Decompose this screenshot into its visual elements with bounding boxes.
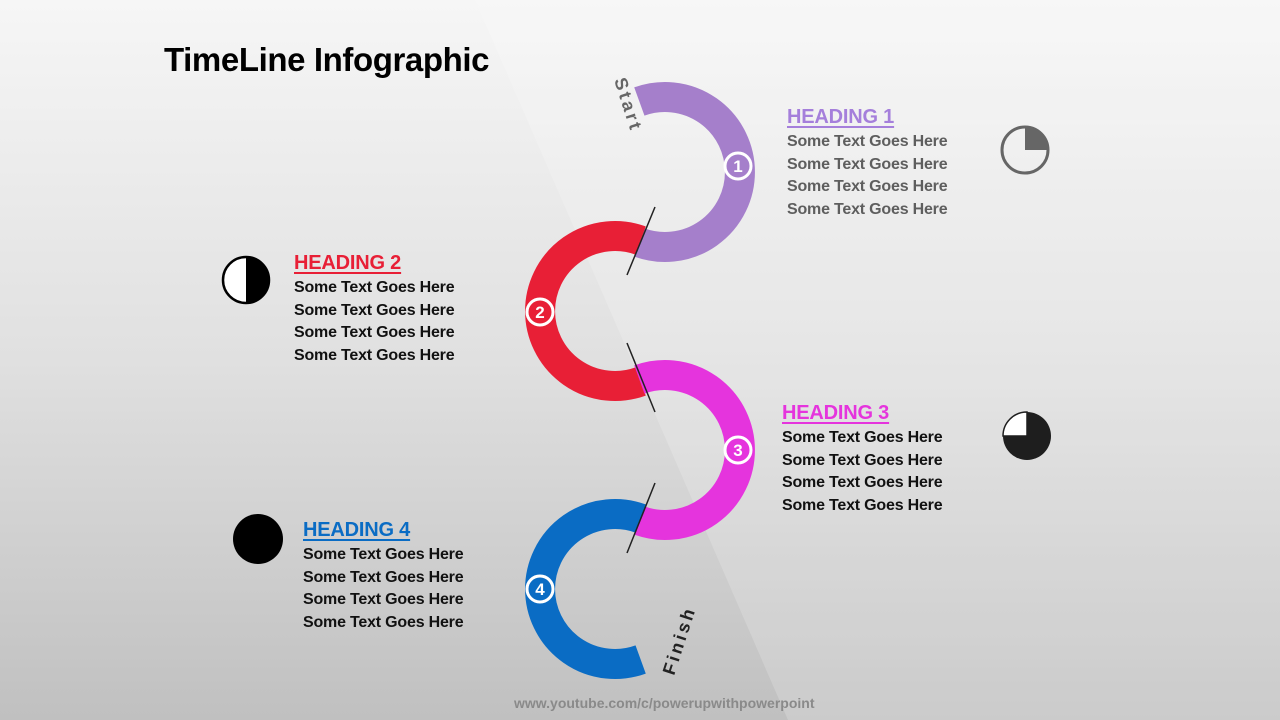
text block: heading 2 xyxy=(294,252,454,364)
text block: heading 2: Some Text Goes Here xyxy=(294,302,454,318)
text block: heading 1: Some Text Goes Here xyxy=(787,178,947,195)
text block: heading 4: Some Text Goes Here xyxy=(303,568,463,586)
text block: heading 1: Some Text Goes Here xyxy=(787,156,947,172)
marker 4 xyxy=(527,576,553,602)
text block: heading 3: Some Text Goes Here xyxy=(782,474,942,491)
ring 3 magenta xyxy=(639,375,740,525)
text block: heading 4: Some Text Goes Here xyxy=(303,546,463,563)
text block: heading 1: Some Text Goes Here xyxy=(787,200,947,218)
marker 3: 3 xyxy=(733,441,743,460)
marker 1: 1 xyxy=(733,157,743,176)
start label: Start xyxy=(610,75,647,135)
icon: full pie xyxy=(233,514,283,564)
text block: heading 3: HEADING 3 xyxy=(782,402,889,424)
text block: heading 1: HEADING 1 xyxy=(787,106,894,128)
light diagonal band xyxy=(475,0,1280,720)
timeline rings xyxy=(540,97,740,664)
icon: quarter pie xyxy=(1002,127,1048,173)
text block: heading 2: HEADING 2 xyxy=(294,252,401,274)
text block: heading 4 xyxy=(303,519,464,630)
ring 1 purple xyxy=(639,97,740,247)
text block: heading 2: Some Text Goes Here xyxy=(294,324,454,341)
icon: half pie xyxy=(223,257,269,303)
text block: heading 4: Some Text Goes Here xyxy=(303,614,463,630)
title: TimeLine Infographic xyxy=(164,41,489,78)
marker 1 xyxy=(725,153,751,179)
text block: heading 1 xyxy=(787,106,948,218)
marker 2 xyxy=(527,299,553,325)
marker 4: 4 xyxy=(535,580,545,599)
ring 2 red xyxy=(540,236,641,386)
text block: heading 2: Some Text Goes Here xyxy=(294,346,454,364)
junction lines xyxy=(627,207,655,553)
text block: heading 2: Some Text Goes Here xyxy=(294,279,454,296)
text block: heading 1: Some Text Goes Here xyxy=(787,133,947,150)
text block: heading 3 xyxy=(782,402,942,514)
footer url: www.youtube.com/c/powerupwithpowerpoint xyxy=(514,695,814,711)
text block: heading 3: Some Text Goes Here xyxy=(782,496,942,514)
marker 2: 2 xyxy=(535,303,545,322)
text block: heading 4: Some Text Goes Here xyxy=(303,591,463,608)
finish label: Finish xyxy=(659,604,700,677)
text block: heading 4: HEADING 4 xyxy=(303,519,410,541)
text block: heading 3: Some Text Goes Here xyxy=(782,429,942,446)
marker 3 xyxy=(725,437,751,463)
icon: three-quarter pie xyxy=(1003,412,1051,460)
ring 4 blue xyxy=(540,514,641,664)
text block: heading 3: Some Text Goes Here xyxy=(782,452,942,468)
